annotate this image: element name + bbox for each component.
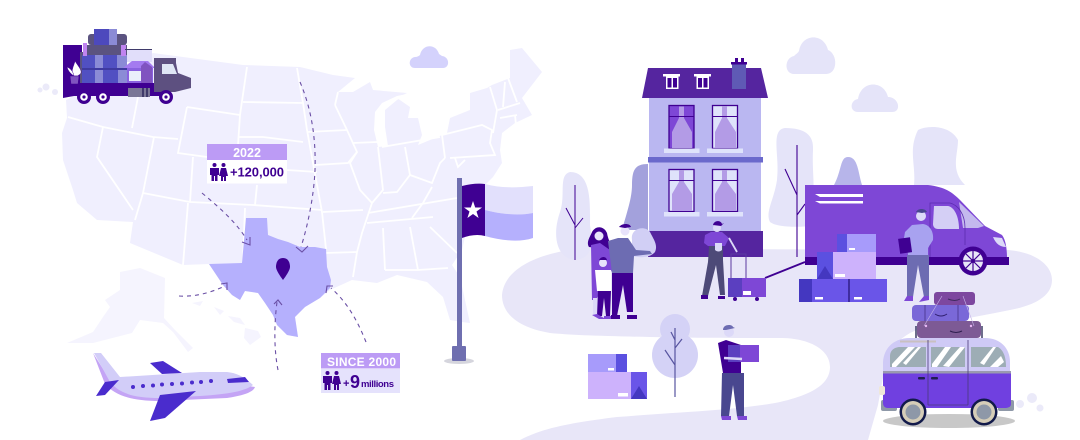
map: Texas highlighted [209, 218, 331, 337]
icon: two people [323, 371, 341, 390]
overalls [702, 232, 725, 296]
callout: since 2000: millions [361, 379, 394, 390]
man [608, 224, 652, 319]
van door [930, 203, 965, 258]
flag [444, 178, 533, 364]
icon: cloud right [852, 84, 898, 112]
house body [649, 98, 761, 232]
windshield [959, 202, 984, 228]
plane fuselage [94, 353, 253, 398]
bush behind family [632, 228, 656, 257]
flag base shadow [444, 358, 474, 364]
map: Lake Michigan [374, 94, 407, 147]
boxes lower left [588, 354, 647, 399]
van window [933, 206, 959, 229]
floor band [648, 157, 763, 162]
ground: main lavender area [502, 247, 1052, 440]
ground: bottom lavender area [520, 402, 846, 440]
truck wheels [77, 90, 173, 104]
child [592, 257, 611, 319]
icon: star [464, 201, 482, 218]
camper bus [879, 338, 1015, 428]
roof rack [900, 340, 936, 342]
icon: location pin [276, 258, 290, 280]
truck chassis block [128, 88, 150, 97]
callout: 2022 [207, 144, 287, 184]
icon: cloud top right [786, 37, 835, 74]
chimney [731, 58, 747, 89]
cart tow line [765, 262, 805, 278]
flag lower stripe [485, 210, 533, 241]
van sill [805, 257, 1009, 265]
stacked boxes by van [799, 234, 887, 302]
shirt [704, 232, 729, 246]
bus bumpers [881, 400, 1014, 411]
dormer windows [663, 74, 711, 89]
bus headlight [879, 386, 885, 395]
bus shadow [883, 414, 1015, 428]
woman [588, 227, 612, 315]
icon: cloud over map [410, 46, 448, 68]
truck cargo [80, 29, 155, 83]
plane [93, 353, 255, 421]
person with clipboard [898, 209, 933, 302]
bus windows [890, 347, 1006, 367]
windows with curtains [664, 106, 743, 216]
van body [805, 185, 1007, 258]
cart box [728, 278, 766, 297]
callout: since 2000: 9 [350, 372, 360, 392]
plane lower lip [93, 353, 255, 401]
map: Alaska [67, 268, 193, 352]
bus roof [883, 338, 1010, 372]
house base [648, 231, 763, 257]
house [642, 58, 768, 257]
bus lower body [883, 373, 1011, 408]
trees behind house and van [556, 127, 965, 260]
flag upper stripe [485, 184, 533, 214]
icon: plant [67, 61, 81, 84]
callout: since 2000 [321, 353, 400, 393]
moving van [805, 185, 1009, 276]
van wheel [958, 246, 988, 276]
routes: dashed arrows into Texas [179, 82, 366, 370]
truck cab [154, 58, 191, 92]
decorative dots near bus [1016, 393, 1044, 412]
roof [642, 68, 768, 98]
van stripes [815, 194, 863, 204]
plane windows [131, 379, 213, 389]
headlight [993, 237, 1006, 247]
map: Hawaii [192, 301, 261, 345]
bus wheels [900, 398, 998, 426]
cart handle [731, 254, 746, 280]
decorative dots near truck [38, 84, 58, 95]
cab window [162, 64, 177, 74]
delivery man with box [718, 325, 759, 420]
truck bed [63, 45, 175, 98]
callout: since 2000: SINCE 2000 [327, 355, 396, 369]
family [588, 224, 652, 319]
plane wings [96, 361, 249, 421]
map: United States [62, 48, 542, 337]
worker with cart [701, 221, 805, 301]
tree lower center [652, 314, 698, 397]
callout: 2022: +120,000 [230, 164, 284, 180]
callout: 2022: 2022 [233, 146, 261, 160]
flag hoist [462, 184, 485, 238]
truck [63, 29, 191, 104]
suitcases on roof [912, 292, 982, 340]
icon: two people [210, 163, 228, 181]
callout: since 2000: + [343, 378, 349, 390]
bus door lines [928, 340, 968, 405]
flag pole [457, 178, 462, 348]
